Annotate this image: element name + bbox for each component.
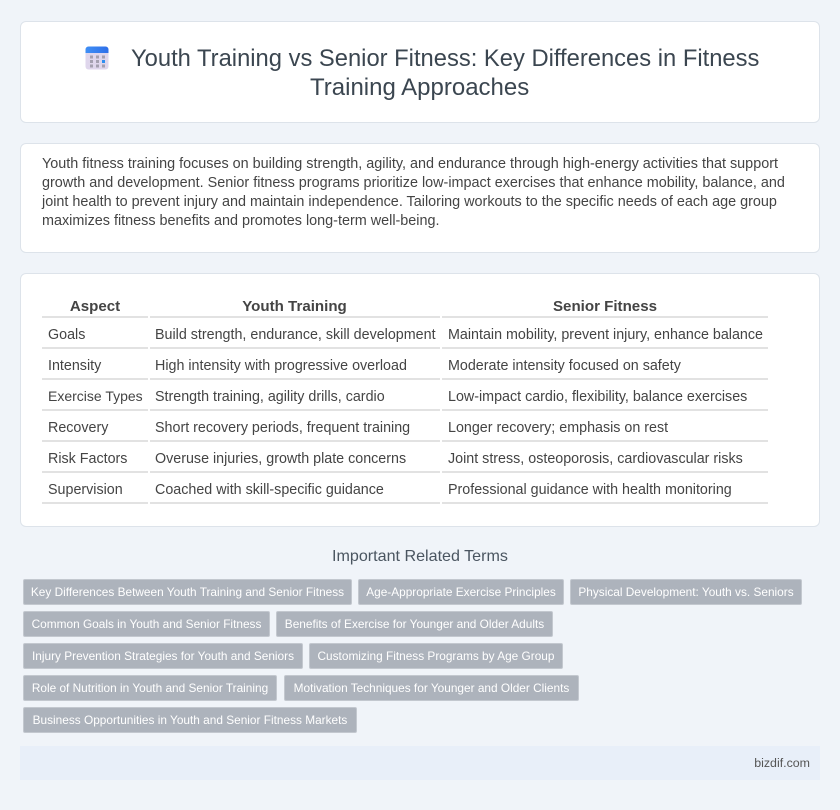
intro text: [42, 156, 785, 229]
comparison table: Senior Fitness: [553, 298, 657, 315]
comparison table: Short recovery periods, frequent training: [155, 420, 410, 436]
intro text: growth and development. Senior fitness programs prioritize low-impact exercises that enhance mobility, balance, and: [42, 175, 785, 191]
title: [131, 45, 759, 101]
icon: calendar: [86, 46, 108, 70]
related terms tags: Injury Prevention Strategies for Youth and Seniors: [32, 649, 294, 663]
related terms tags: Age-Appropriate Exercise Principles: [366, 585, 556, 599]
comparison table: [42, 298, 768, 504]
footer bar: [20, 746, 820, 780]
intro text: joint health to prevent injury and maintain independence. Tailoring workouts to the specific needs of each age group: [42, 194, 777, 210]
comparison table: Professional guidance with health monitoring: [448, 482, 732, 498]
intro text: maximizes fitness benefits and promotes long-term well-being.: [42, 213, 440, 229]
title: Youth Training vs Senior Fitness: Key Differences in Fitness: [131, 45, 759, 72]
comparison table: Low-impact cardio, flexibility, balance exercises: [448, 389, 747, 405]
related terms tags: Business Opportunities in Youth and Senior Fitness Markets: [33, 713, 347, 727]
title: Training Approaches: [310, 74, 529, 101]
related terms heading: Important Related Terms: [332, 547, 508, 565]
footer source: bizdif.com: [754, 756, 810, 770]
comparison table: Supervision: [48, 482, 123, 498]
comparison table: Maintain mobility, prevent injury, enhance balance: [448, 327, 763, 343]
comparison table: Build strength, endurance, skill development: [155, 327, 436, 343]
comparison table: Exercise Types: [48, 388, 143, 404]
intro panel: [20, 143, 820, 253]
related terms tags: Role of Nutrition in Youth and Senior Training: [32, 681, 268, 695]
comparison table: Moderate intensity focused on safety: [448, 358, 681, 374]
comparison table: Overuse injuries, growth plate concerns: [155, 451, 406, 467]
comparison table: Strength training, agility drills, cardio: [155, 389, 385, 405]
comparison table: Risk Factors: [48, 451, 127, 467]
comparison table: Joint stress, osteoporosis, cardiovascular risks: [448, 451, 743, 467]
related terms tags: [23, 579, 802, 733]
related terms tags: Motivation Techniques for Younger and Older Clients: [294, 681, 569, 695]
comparison table: Longer recovery; emphasis on rest: [448, 420, 668, 436]
comparison table: Goals: [48, 327, 85, 343]
related terms tags: Benefits of Exercise for Younger and Older Adults: [285, 617, 544, 631]
comparison table: Coached with skill-specific guidance: [155, 482, 384, 498]
comparison table: Recovery: [48, 420, 108, 436]
related terms tags: Common Goals in Youth and Senior Fitness: [32, 617, 261, 631]
comparison table: Aspect: [70, 298, 120, 315]
intro text: Youth fitness training focuses on building strength, agility, and endurance through high-energy activities that support: [42, 156, 778, 172]
comparison table: Intensity: [48, 358, 101, 374]
header panel: [20, 21, 820, 123]
comparison table: High intensity with progressive overload: [155, 358, 407, 374]
related terms tags: Key Differences Between Youth Training and Senior Fitness: [31, 585, 344, 599]
related terms tags: Customizing Fitness Programs by Age Group: [318, 649, 554, 663]
comparison table: Youth Training: [242, 298, 347, 315]
comparison table panel: [20, 273, 820, 527]
related terms tags: Physical Development: Youth vs. Seniors: [578, 585, 794, 599]
